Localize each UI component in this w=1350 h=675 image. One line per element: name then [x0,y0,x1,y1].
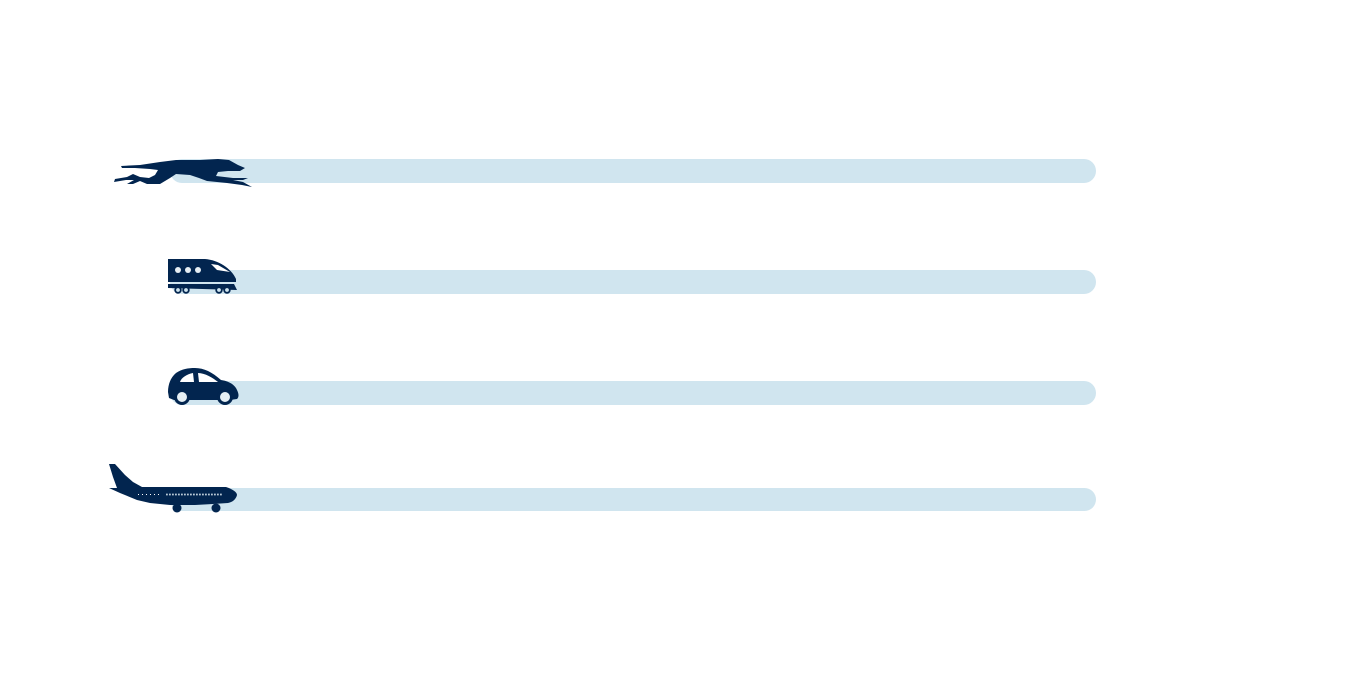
bar: plane track [170,488,1096,511]
icon: car [168,368,238,404]
bar: car track [170,381,1096,405]
row: train [168,259,1096,294]
bar: greyhound track [170,159,1096,183]
bar: train track [170,270,1096,294]
icon: bullet train [168,259,237,293]
row: greyhound [114,159,1096,187]
row: plane [109,464,1096,512]
row: car [168,368,1096,405]
icon: greyhound [114,159,252,187]
icon: airplane [109,464,237,512]
